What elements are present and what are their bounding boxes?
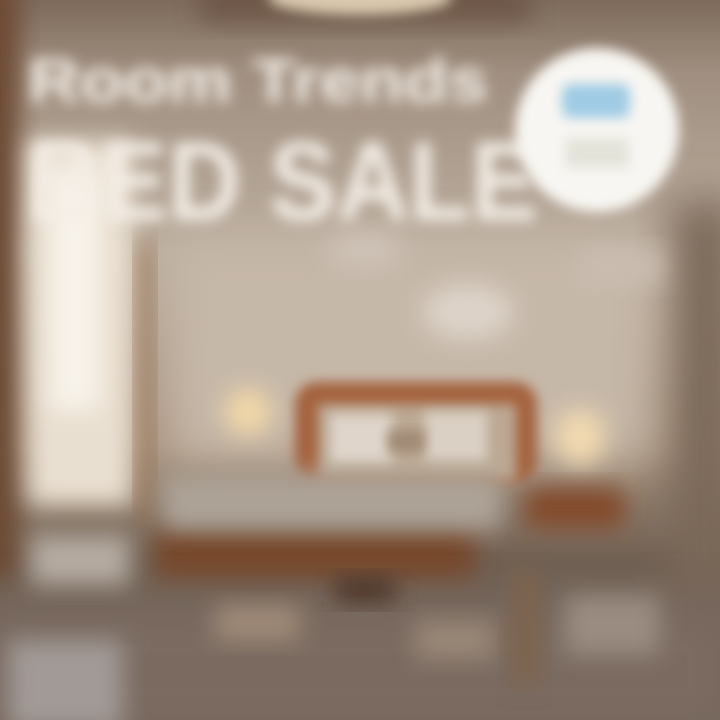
bedding <box>162 474 502 530</box>
title: BED SALE <box>28 119 538 244</box>
ceiling light <box>268 0 452 15</box>
title: Room Trends <box>28 47 488 116</box>
lamp right <box>554 409 606 465</box>
pillows <box>330 412 487 464</box>
bed base <box>155 528 475 580</box>
lamp left <box>224 388 272 436</box>
wall decor <box>327 232 660 340</box>
circular badge <box>515 48 679 212</box>
headboard <box>295 382 537 482</box>
title <box>28 47 538 244</box>
floor <box>0 535 720 720</box>
window curtain <box>28 140 152 520</box>
nightstand <box>525 488 625 528</box>
